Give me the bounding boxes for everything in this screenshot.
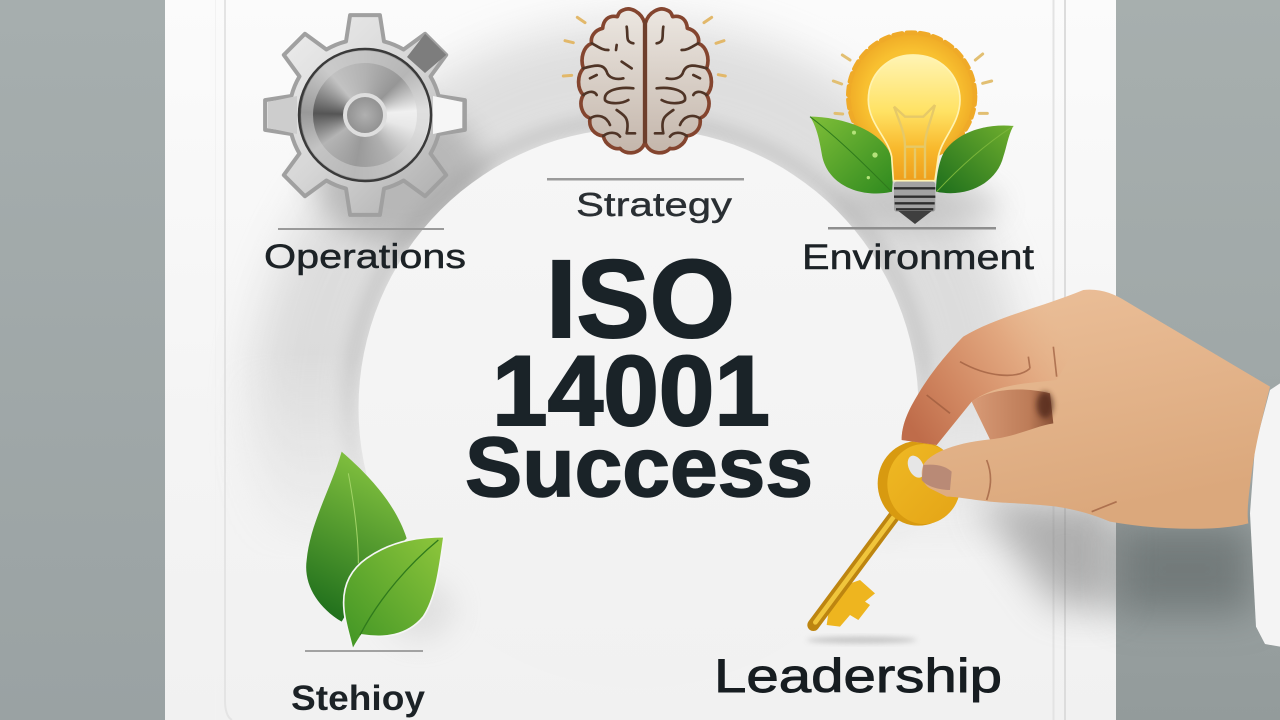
key [813,441,961,627]
curled finger [972,390,1053,439]
central circle [358,128,918,688]
title: ISO 14001 Success: Success [465,420,813,514]
label: Strategy: Strategy [576,186,733,223]
icon: gear (Operations) [265,15,465,215]
brain midline [639,20,651,143]
shadow under hand [977,500,1253,613]
brain left lobe [579,9,645,153]
rays [833,54,992,114]
brain right lobe [645,9,711,153]
left leaf [810,117,893,193]
key and hand illustration [807,290,1280,647]
index finger [902,290,1083,445]
front leaf [344,537,444,650]
circle shadow ring [245,11,1021,498]
label: Operations: Operations [264,238,466,276]
icon shadows [315,105,1000,245]
icon: light bulb with leaves (Environment) [810,33,1013,224]
icon: brain (Strategy) [563,9,725,153]
brain rays [563,17,725,76]
finger shadow [1037,392,1053,418]
shirt cuff [1250,383,1280,647]
divider: Strategy [547,178,744,180]
divider: leaves [305,650,423,652]
right leaf [936,126,1013,193]
title: ISO 14001 Success: 14001 [492,335,770,446]
sun burst [848,33,975,159]
bulb glass [868,55,960,181]
icon: leaves [306,452,444,650]
label: garbled leaf caption: Stehioy [291,679,426,718]
panel: paper sheet [165,0,1116,720]
divider: Operations [278,228,444,230]
title: ISO 14001 Success: ISO [546,238,735,361]
thumb nail [922,465,952,490]
label: Leadership: Leadership [714,649,1002,702]
leaf shadow [386,580,454,640]
filament [894,105,935,178]
key shadow [807,637,917,643]
bulb screw base [894,182,935,224]
hand [902,290,1270,529]
title: ISO 14001 Success [465,238,813,514]
back leaf [306,452,407,622]
divider: Environment [828,227,996,230]
finger creases [927,347,1117,512]
label: Environment: Environment [802,238,1034,277]
